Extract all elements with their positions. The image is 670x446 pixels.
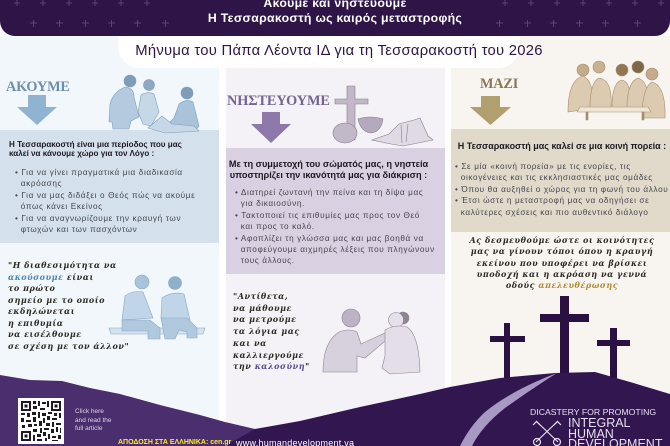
panel: left background	[0, 36, 219, 446]
bullet list: • Για να γίνει πραγματικά μια διαδικασία ακρόασης • Για να μας διδάξει ο Θεός πώς να ακούμε όπως κάνει Εκείνος • Για να αναγνωρίζουμε την κραυγή των φτωχών και των πασχόντων	[15, 168, 195, 234]
logo: dicastery	[530, 407, 662, 446]
bullet list: • Σε μία «κοινή πορεία» με τις ενορίες, τις οικογένειες και τις εκκλησιαστικές μας ομάδες • Όπου θα αυξηθεί ο χώρος για τη φωνή του άλλου • Έτσι ώστε η μεταστροφή μας να οδηγήσει σε καλύτερες σχέσεις και πιο αυθεντικό διάλογο	[455, 162, 668, 217]
box heading: Η Τεσσαρακοστή μας καλεί σε μια κοινή πορεία :	[458, 141, 666, 151]
middle hill	[225, 372, 670, 446]
subtitle backdrop	[118, 30, 520, 68]
heading: μαζί: ΜΑΖΙ	[480, 76, 518, 92]
title	[208, 0, 462, 24]
three crosses	[490, 296, 630, 382]
quote: νηστεύουμε: καλλιεργούμε	[233, 350, 304, 360]
text box: νηστεύουμε	[226, 148, 445, 274]
quote: ακούμε: σε σχέση με τον άλλον"	[8, 340, 129, 350]
icon: crossed keys	[532, 420, 562, 446]
arrow: ακούμε	[17, 95, 57, 125]
panel: middle background	[226, 60, 445, 446]
quote: ακούμε: ακούσουμε είναι	[8, 272, 94, 282]
qr caption: Click here	[75, 408, 104, 415]
box heading: Με τη συμμετοχή του σώματός μας, η νηστεία	[229, 159, 428, 169]
header crosses	[14, 0, 664, 27]
panel: ακούμε	[0, 79, 219, 243]
logo name: INTEGRAL	[568, 416, 631, 430]
header band	[0, 0, 670, 36]
bullet list: • Διατηρεί ζωντανή την πείνα και τη δίψα μας για δικαιοσύνη. • Τακτοποιεί τις επιθυμίες μας προς τον Θεό και προς το καλό. • Αφοπλίζει τη γλώσσα μας και μας βοηθά να αποφεύγουμε αιχμηρές λέξεις που πληγώνουν τους άλλους.	[235, 188, 435, 265]
qr caption	[75, 408, 112, 432]
quote: ακούμε: εκδηλώνεται	[8, 306, 75, 316]
panel: μαζί	[451, 76, 670, 232]
logo name: HUMAN	[568, 427, 614, 441]
qr code	[18, 398, 64, 444]
quote: ακούμε: σημείο με το οποίο	[8, 294, 105, 304]
heading: ακούμε: ΑΚΟΥΜΕ	[6, 79, 70, 95]
quote: μαζί: εκείνου που υποφέρει να βρίσκει	[477, 258, 647, 268]
text box: μαζί	[451, 129, 670, 232]
quote: ακούμε: η επιθυμία	[8, 318, 63, 328]
box heading	[9, 140, 182, 158]
quote: νηστεύουμε: "Αντίθετα,	[233, 291, 288, 301]
quote: ακούμε	[8, 260, 129, 351]
quote: ακούμε: να εισέλθουμε	[8, 329, 82, 339]
quote: νηστεύουμε: να μάθουμε	[233, 303, 292, 313]
panel: νηστεύουμε	[226, 93, 445, 274]
box heading: Η Τεσσαρακοστή είναι μια περίοδος που μας	[9, 140, 182, 149]
arrow: μαζί	[470, 96, 511, 125]
winding path	[460, 373, 557, 446]
quote: νηστεύουμε: την καλοσύνη"	[233, 361, 310, 371]
panel: right background	[451, 36, 670, 446]
quote: μαζί: οδούς απελευθέρωσης	[506, 280, 618, 290]
qr caption: full article	[75, 425, 102, 432]
translation credit: ΑΠΟΔΟΣΗ ΣΤΑ ΕΛΛΗΝΙΚΑ: cen.gr	[118, 439, 231, 446]
logo name	[568, 416, 662, 446]
left hill	[0, 375, 300, 446]
box heading: καλεί να κάνουμε χώρο για τον Λόγο :	[9, 148, 154, 158]
quote: μαζί: Ας δεσμευθούμε ώστε οι κοινότητες	[469, 235, 655, 245]
quote: μαζί	[468, 235, 655, 290]
quote: μαζί: υποδοχή και η ακρόαση να γεννά	[477, 269, 647, 279]
subtitle: Μήνυμα του Πάπα Λέοντα ΙΔ για τη Τεσσαρακοστή του 2026	[135, 43, 543, 59]
box heading	[229, 159, 428, 180]
quote: ακούμε: το πρώτο	[8, 283, 55, 293]
box heading: υποστηρίζει την ικανότητά μας για διάκριση :	[230, 170, 427, 180]
quote: νηστεύουμε	[232, 291, 310, 371]
qr caption: and read the	[75, 416, 112, 424]
arrow: νηστεύουμε	[251, 112, 291, 143]
heading: νηστεύουμε: ΝΗΣΤΕΥΟΥΜΕ	[227, 93, 330, 109]
title: Η Τεσσαρακοστή ως καιρός μεταστροφής	[208, 10, 462, 24]
quote: ακούμε: "Η διαθεσιμότητα να	[8, 260, 117, 270]
quote: μαζί: μας να γίνουν τόποι όπου η κραυγή	[471, 246, 653, 256]
logo line: DICASTERY FOR PROMOTING	[530, 407, 656, 417]
quote: νηστεύουμε: να μετρούμε	[233, 314, 297, 324]
text box: ακούμε	[0, 130, 219, 243]
quote: νηστεύουμε: και να	[233, 338, 267, 348]
quote: νηστεύουμε: τα λόγια μας	[233, 326, 300, 336]
